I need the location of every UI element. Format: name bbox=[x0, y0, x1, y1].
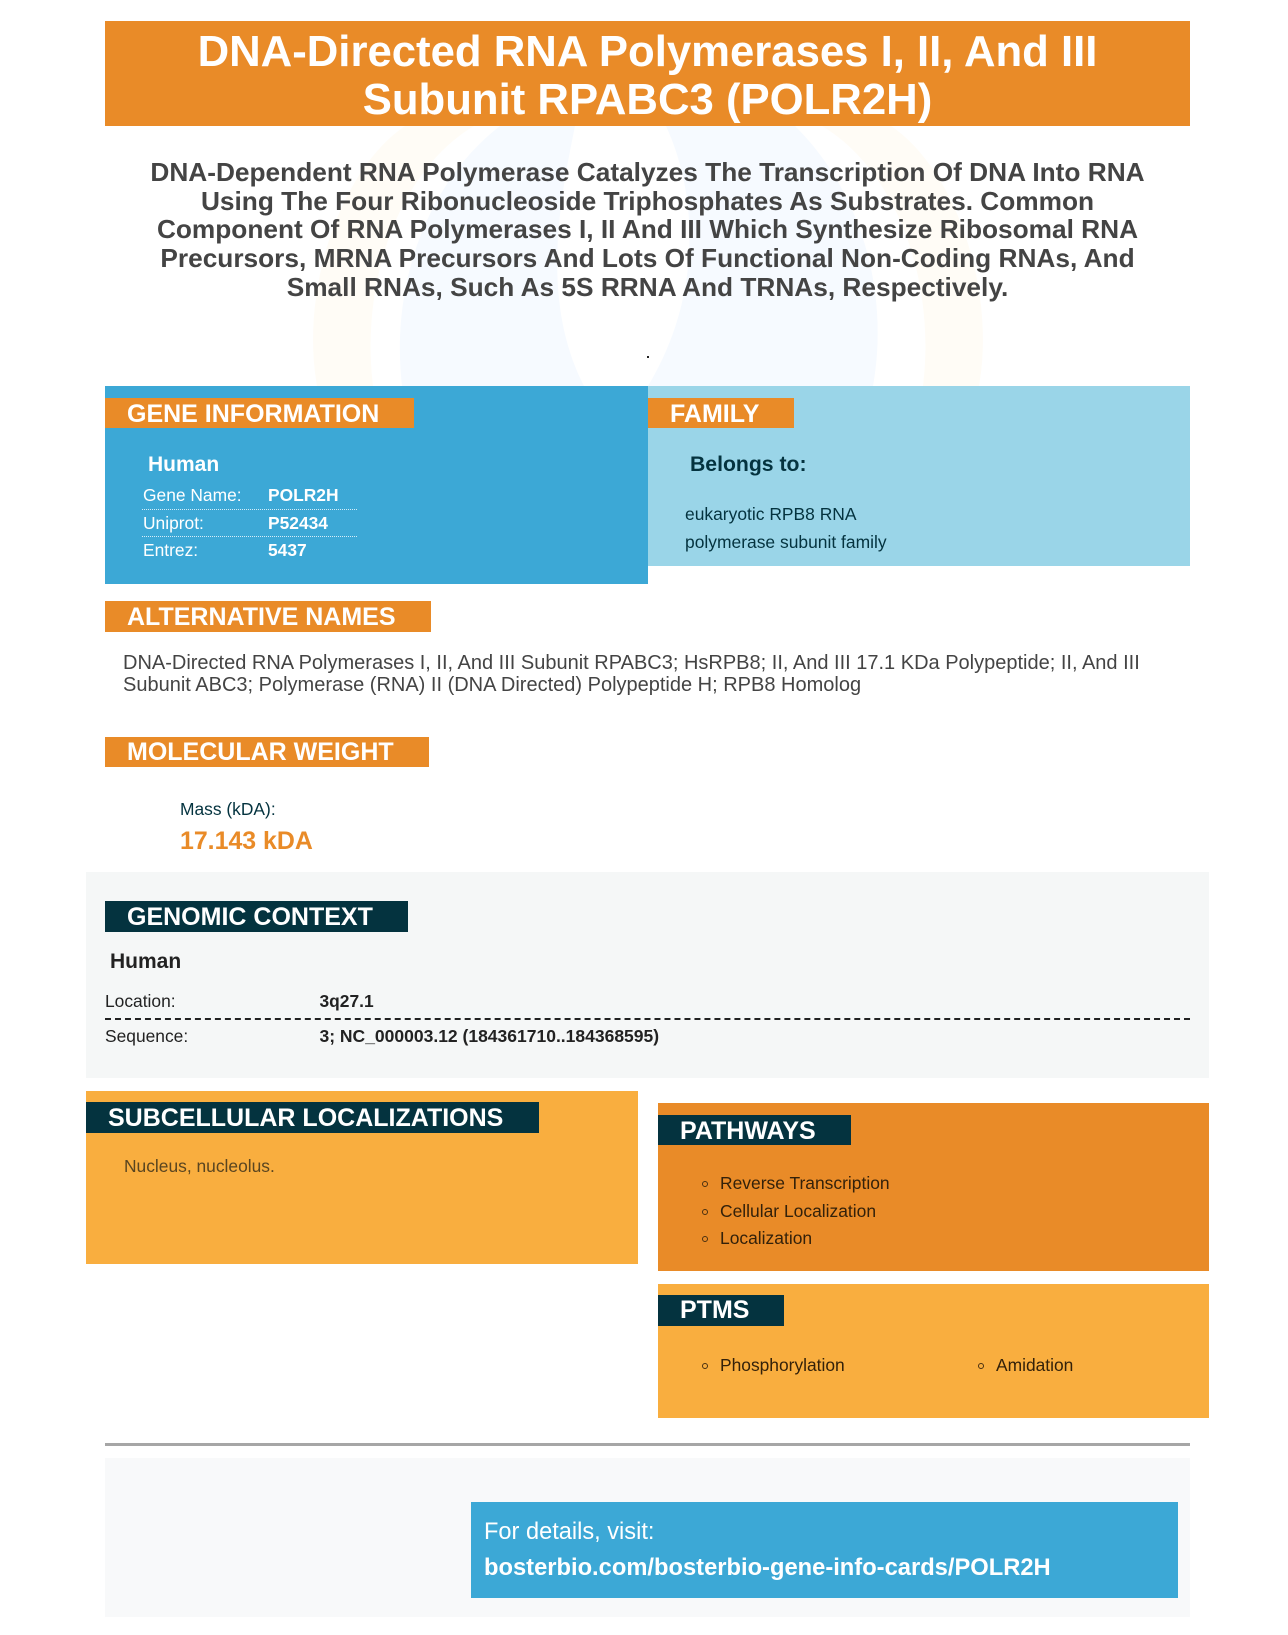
panel: subcellular localizations bbox=[86, 1091, 638, 1264]
localization text: Nucleus, nucleolus. bbox=[124, 1156, 275, 1176]
location row: Location: bbox=[105, 991, 176, 1011]
sequence row bbox=[105, 1026, 659, 1046]
small dot bbox=[647, 356, 649, 358]
heading: family bbox=[648, 398, 794, 428]
alternative names text: Subunit ABC3; Polymerase (RNA) II (DNA Directed) Polypeptide H; RPB8 Homolog bbox=[123, 674, 861, 696]
entrez row: Entrez: bbox=[143, 540, 198, 560]
panel: footer bbox=[105, 1458, 1190, 1617]
sequence row: 3; NC_000003.12 (184361710..184368595) bbox=[320, 1026, 659, 1046]
mass value: 17.143 kDA bbox=[180, 827, 313, 855]
pathway item: Localization bbox=[720, 1228, 812, 1248]
gene name row bbox=[142, 486, 357, 510]
description text: Small RNAs, Such As 5S RRNA And TRNAs, Respectively. bbox=[287, 272, 1008, 302]
alternative names text: DNA-Directed RNA Polymerases I, II, And III Subunit RPABC3; HsRPB8; II, And III 17.1 KDa Polypeptide; II, And III bbox=[123, 652, 1140, 674]
sequence row: Sequence: bbox=[105, 1026, 188, 1046]
panel: genomic context bbox=[86, 872, 1209, 1078]
heading: alternative names: ALTERNATIVE NAMES bbox=[127, 603, 396, 631]
entrez row bbox=[143, 540, 307, 560]
heading: pathways: PATHWAYS bbox=[680, 1117, 816, 1145]
entrez row: 5437 bbox=[268, 540, 307, 560]
title banner: DNA-Directed RNA Polymerases I, II, And III bbox=[198, 27, 1097, 76]
description text: Using The Four Ribonucleoside Triphosphates As Substrates. Common bbox=[201, 186, 1094, 216]
heading: pathways bbox=[658, 1115, 851, 1145]
uniprot row: P52434 bbox=[268, 513, 328, 533]
gene name row: Gene Name: bbox=[143, 485, 242, 505]
ptm item: Amidation bbox=[996, 1355, 1073, 1375]
heading: family: FAMILY bbox=[670, 400, 759, 428]
title banner bbox=[105, 21, 1190, 126]
uniprot row bbox=[142, 514, 357, 537]
description text: DNA-Dependent RNA Polymerase Catalyzes The Transcription Of DNA Into RNA bbox=[150, 157, 1145, 187]
gene name row: POLR2H bbox=[268, 485, 339, 505]
heading: genomic context: GENOMIC CONTEXT bbox=[127, 903, 373, 931]
species label: Human bbox=[110, 950, 181, 973]
heading: subcellular localizations: SUBCELLULAR LOCALIZATIONS bbox=[108, 1104, 503, 1132]
panel: gene information bbox=[105, 386, 648, 584]
heading: ptms: PTMS bbox=[680, 1296, 749, 1324]
description text: Precursors, MRNA Precursors And Lots Of Functional Non-Coding RNAs, And bbox=[160, 243, 1135, 273]
uniprot row: Uniprot: bbox=[143, 513, 204, 533]
callout: details link: bosterbio.com/bosterbio-gene-info-cards/POLR2H bbox=[484, 1555, 1051, 1581]
description text: Component Of RNA Polymerases I, II And III Which Synthesize Ribosomal RNA bbox=[157, 214, 1138, 244]
panel: pathways bbox=[658, 1103, 1209, 1271]
panel: ptms bbox=[658, 1284, 1209, 1418]
panel: family bbox=[648, 386, 1190, 566]
location row bbox=[105, 991, 1190, 1020]
heading: molecular weight: MOLECULAR WEIGHT bbox=[127, 738, 394, 766]
heading: gene information: GENE INFORMATION bbox=[127, 400, 379, 428]
location row: 3q27.1 bbox=[320, 991, 374, 1011]
title banner: Subunit RPABC3 (POLR2H) bbox=[363, 74, 932, 124]
family description bbox=[685, 504, 887, 552]
species label: Human bbox=[148, 453, 219, 476]
mass label: Mass (kDA): bbox=[180, 799, 276, 819]
callout: details link: For details, visit: bbox=[484, 1519, 654, 1545]
family description: eukaryotic RPB8 RNA bbox=[685, 504, 857, 524]
family description: polymerase subunit family bbox=[685, 532, 887, 552]
pathway item: Reverse Transcription bbox=[720, 1173, 890, 1193]
ptm item: Phosphorylation bbox=[720, 1355, 845, 1375]
callout: details link bbox=[471, 1502, 1178, 1598]
alternative names text bbox=[123, 652, 1140, 696]
pathway item: Cellular Localization bbox=[720, 1201, 876, 1221]
description text bbox=[150, 157, 1145, 302]
belongs to label: Belongs to: bbox=[690, 453, 807, 476]
heading: ptms bbox=[658, 1295, 784, 1326]
